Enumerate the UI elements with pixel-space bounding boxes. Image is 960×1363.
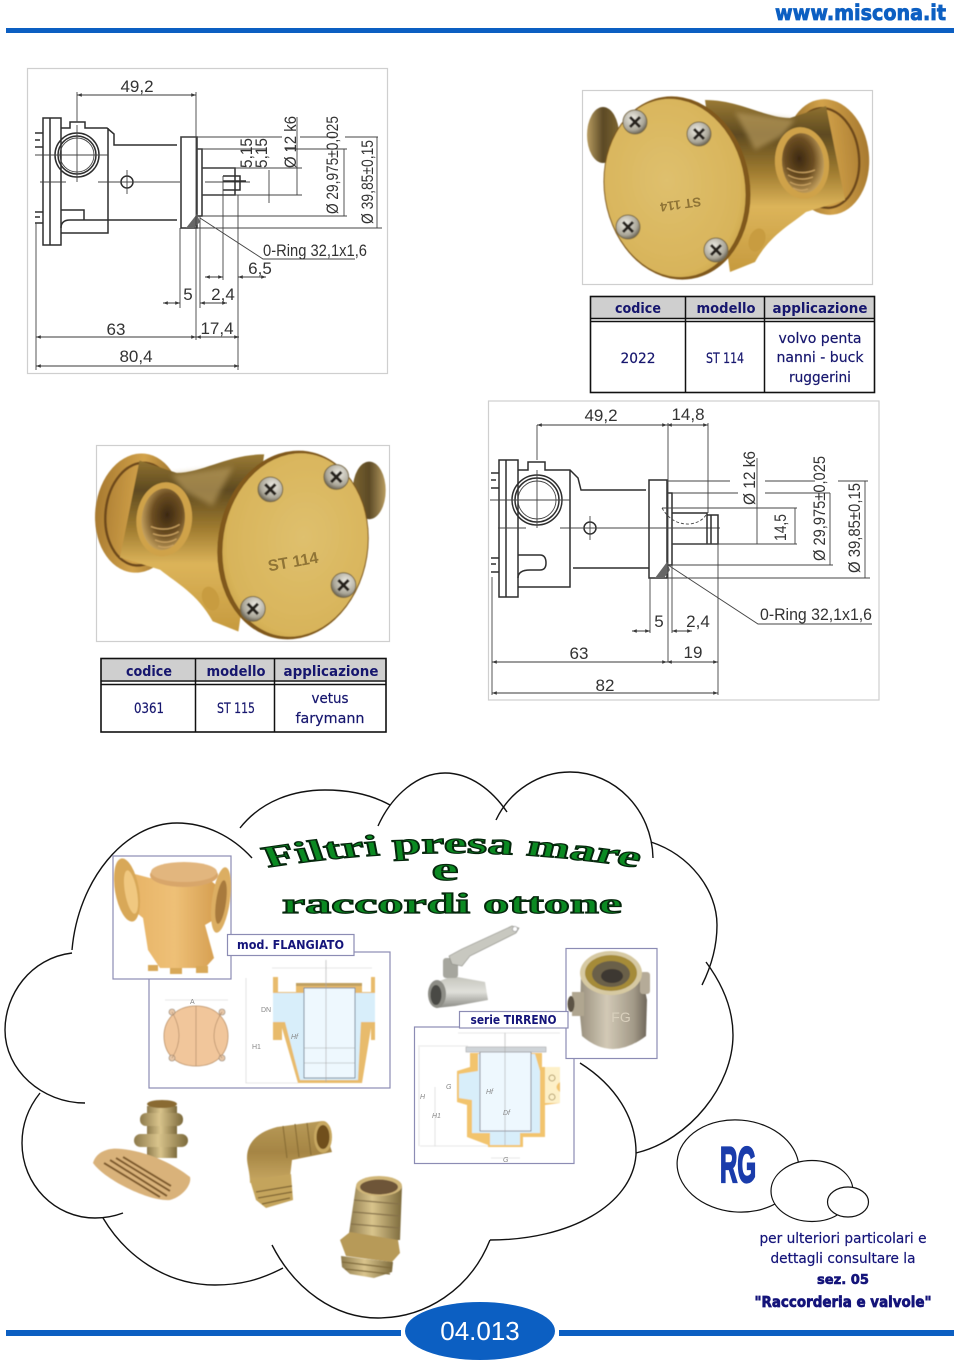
title: raccordi ottone bbox=[282, 888, 622, 920]
photo: brass pump ST 114 bbox=[582, 86, 875, 290]
technical drawing: pump ST 114: 17,4 bbox=[200, 319, 234, 338]
small cloud: logo bubble bbox=[673, 1115, 868, 1222]
cell: application: farymann bbox=[296, 711, 364, 727]
technical drawing: pump ST 114: 49,2 bbox=[120, 77, 154, 96]
diagram: FLANGIATO filter section: DN bbox=[261, 1007, 271, 1014]
cell: model ST 115: ST 115 bbox=[217, 701, 255, 717]
diagram: TIRRENO filter section: Hf bbox=[486, 1089, 494, 1096]
diagram: TIRRENO filter section bbox=[414, 1027, 574, 1164]
photo: ball valve bbox=[428, 926, 519, 1008]
technical drawing: pump ST 115: Ø 29,975±0,025 bbox=[810, 456, 829, 561]
title: Filtri presa mare bbox=[259, 834, 641, 868]
technical drawing: pump ST 115: 63 bbox=[570, 644, 588, 663]
cell: application: volvo penta bbox=[778, 331, 862, 347]
header: modello: modello bbox=[696, 301, 756, 317]
diagram: TIRRENO filter section: G bbox=[503, 1157, 509, 1164]
technical drawing: pump ST 114: 80,4 bbox=[119, 347, 153, 366]
cell: application bbox=[296, 691, 364, 727]
diagram: FLANGIATO filter section: H1 bbox=[252, 1044, 261, 1051]
technical drawing: pump ST 115: 49,2 bbox=[584, 406, 618, 425]
note: further details: dettagli consultare la bbox=[770, 1251, 916, 1267]
technical drawing: pump ST 115 bbox=[488, 401, 879, 700]
technical drawing: pump ST 115: 14,8 bbox=[671, 405, 705, 424]
title: e bbox=[432, 852, 458, 888]
footer rule left bbox=[6, 1330, 401, 1336]
technical drawing: pump ST 114: Ø 12 k6 bbox=[281, 116, 300, 168]
label: mod. FLANGIATO bbox=[228, 934, 354, 956]
photo: brass elbow hose fitting bbox=[247, 1121, 332, 1208]
text: RG bbox=[720, 1137, 756, 1193]
photo: brass straight hose fitting bbox=[340, 1176, 402, 1278]
header: applicazione: applicazione bbox=[284, 664, 378, 680]
technical drawing: pump ST 114: Ø 29,975±0,025 bbox=[323, 116, 342, 214]
technical drawing: pump ST 114 bbox=[28, 68, 388, 374]
main cloud outline bbox=[5, 772, 733, 1318]
header rule bbox=[6, 28, 954, 33]
cell: application: ruggerini bbox=[789, 370, 851, 386]
page number badge bbox=[405, 1302, 555, 1360]
footer rule right bbox=[559, 1330, 954, 1336]
note: further details: sez. 05 bbox=[817, 1273, 869, 1288]
diagram: FLANGIATO filter section: A bbox=[190, 999, 195, 1006]
technical drawing: pump ST 115: 2,4 bbox=[686, 612, 710, 631]
header: applicazione: applicazione bbox=[772, 301, 868, 317]
photo: brass pump ST 115 bbox=[89, 440, 389, 650]
header: modello: modello bbox=[206, 664, 266, 680]
note: further details: per ulteriori particolari e bbox=[760, 1231, 926, 1247]
technical drawing: pump ST 115: 82 bbox=[596, 676, 614, 695]
photo: brass pump ST 114: ST 114 bbox=[658, 194, 702, 215]
header: codice: codice bbox=[126, 664, 172, 680]
diagram: FLANGIATO filter section: Hf bbox=[291, 1034, 299, 1041]
diagram: TIRRENO filter section: H1 bbox=[432, 1113, 441, 1120]
technical drawing: pump ST 114: 5 bbox=[183, 285, 193, 304]
cell: application: vetus bbox=[312, 691, 348, 707]
diagram: TIRRENO filter section: G bbox=[446, 1084, 452, 1091]
diagram: TIRRENO filter section: H bbox=[420, 1094, 426, 1101]
technical drawing: pump ST 114: 0-Ring 32,1x1,6 bbox=[263, 241, 367, 260]
table: pump 2022 bbox=[590, 296, 875, 393]
title bbox=[259, 834, 641, 920]
table: pump 0361 bbox=[101, 658, 386, 732]
photo: TIRRENO filter: FG bbox=[611, 1009, 631, 1025]
technical drawing: pump ST 115: Ø 12 k6 bbox=[740, 451, 759, 505]
technical drawing: pump ST 114: Ø 39,85±0,15 bbox=[358, 140, 377, 224]
cell: application bbox=[776, 331, 864, 386]
cell: model ST 114: ST 114 bbox=[706, 351, 744, 367]
label: serie TIRRENO: serie TIRRENO bbox=[470, 1013, 556, 1027]
cell: application: nanni - buck bbox=[776, 350, 864, 366]
technical drawing: pump ST 114: 5,15 bbox=[237, 138, 256, 168]
technical drawing: pump ST 115: 0-Ring 32,1x1,6 bbox=[760, 605, 872, 624]
page number badge: 04.013 bbox=[440, 1316, 520, 1346]
photo: flanged brass strainer bbox=[110, 856, 235, 979]
diagram: TIRRENO filter section: Df bbox=[503, 1110, 511, 1117]
note: further details bbox=[754, 1231, 932, 1311]
technical drawing: pump ST 114: 63 bbox=[107, 320, 125, 339]
header: codice: codice bbox=[615, 301, 661, 317]
technical drawing: pump ST 114: 6,5 bbox=[248, 259, 272, 278]
technical drawing: pump ST 115: 14,5 bbox=[771, 514, 790, 541]
label: mod. FLANGIATO: mod. FLANGIATO bbox=[237, 938, 344, 952]
website address: www.miscona.it bbox=[775, 1, 946, 25]
technical drawing: pump ST 114: 2,4 bbox=[211, 285, 235, 304]
technical drawing: pump ST 114: 5,15 bbox=[252, 138, 271, 168]
cell: code 2022: 2022 bbox=[620, 351, 656, 367]
photo: TIRRENO filter bbox=[566, 948, 657, 1058]
technical drawing: pump ST 115: Ø 39,85±0,15 bbox=[845, 483, 864, 573]
technical drawing: pump ST 115: 5 bbox=[654, 612, 664, 631]
diagram: FLANGIATO filter section bbox=[149, 952, 390, 1088]
technical drawing: pump ST 115: 19 bbox=[684, 643, 702, 662]
cell: code 0361: 0361 bbox=[134, 701, 164, 717]
note: further details: "Raccorderia e valvole" bbox=[754, 1293, 932, 1311]
photo: brass pump ST 115: ST 114 bbox=[267, 550, 320, 575]
photo: brass intake scoop bbox=[93, 1100, 190, 1200]
